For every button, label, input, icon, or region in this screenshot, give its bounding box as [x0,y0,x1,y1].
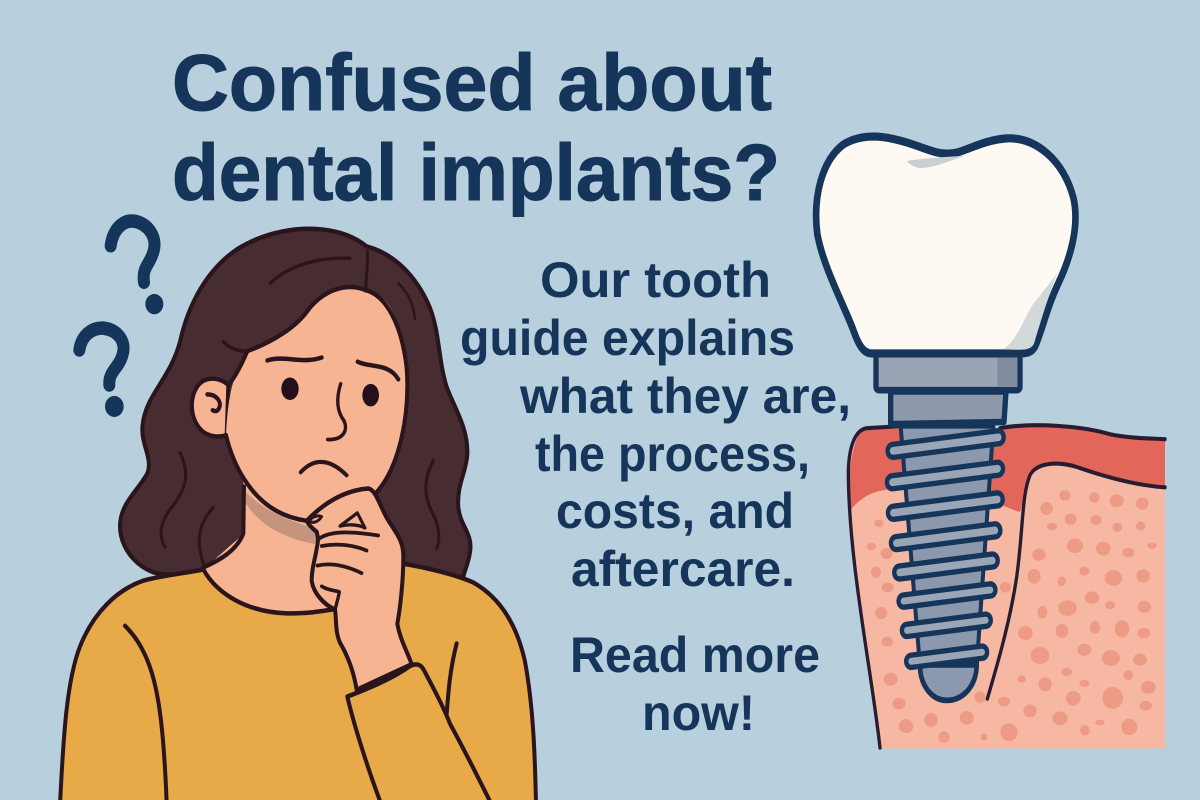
title: Confused about [172,38,772,127]
mouth [301,462,347,475]
sleeve cuff [347,664,491,800]
ear [192,379,228,437]
crown shadows [907,156,965,168]
call to action [570,627,820,741]
gum and bone outlines [848,425,1165,748]
eyebrows [267,358,322,361]
text block: guide description: aftercare. [571,541,795,597]
illustration: dental implant in jaw [816,137,1165,749]
text block: guide description [460,252,851,597]
call to action: Read more [570,627,820,683]
implant tip [920,665,977,700]
text block: guide description: the process, [535,426,810,482]
nose [328,384,345,440]
bone [848,438,1165,749]
neck shadow [246,492,318,544]
bone dots [867,490,1157,743]
text block: guide description: Our tooth [540,252,771,308]
hand and forearm [307,488,412,690]
implant threads [886,430,1004,668]
crown [816,137,1075,353]
sweater [60,564,536,800]
call to action: now! [642,685,755,741]
gum [849,425,1165,512]
implant post [901,426,993,667]
face [226,287,407,522]
implant collar [891,391,1006,424]
text block: guide description: guide explains [460,310,795,366]
fingers [318,532,378,539]
text block: guide description: what they are, [519,368,851,424]
text block: guide description: costs, and [556,483,794,539]
neck [203,481,337,613]
eyes [281,377,299,400]
title: dental implants? [172,128,780,217]
sweater creases [125,626,167,800]
title [172,38,780,217]
illustration: confused woman [60,229,536,800]
abutment [876,353,1020,390]
hair [120,229,471,586]
hair strands [223,342,247,351]
icon: question marks [79,221,163,417]
